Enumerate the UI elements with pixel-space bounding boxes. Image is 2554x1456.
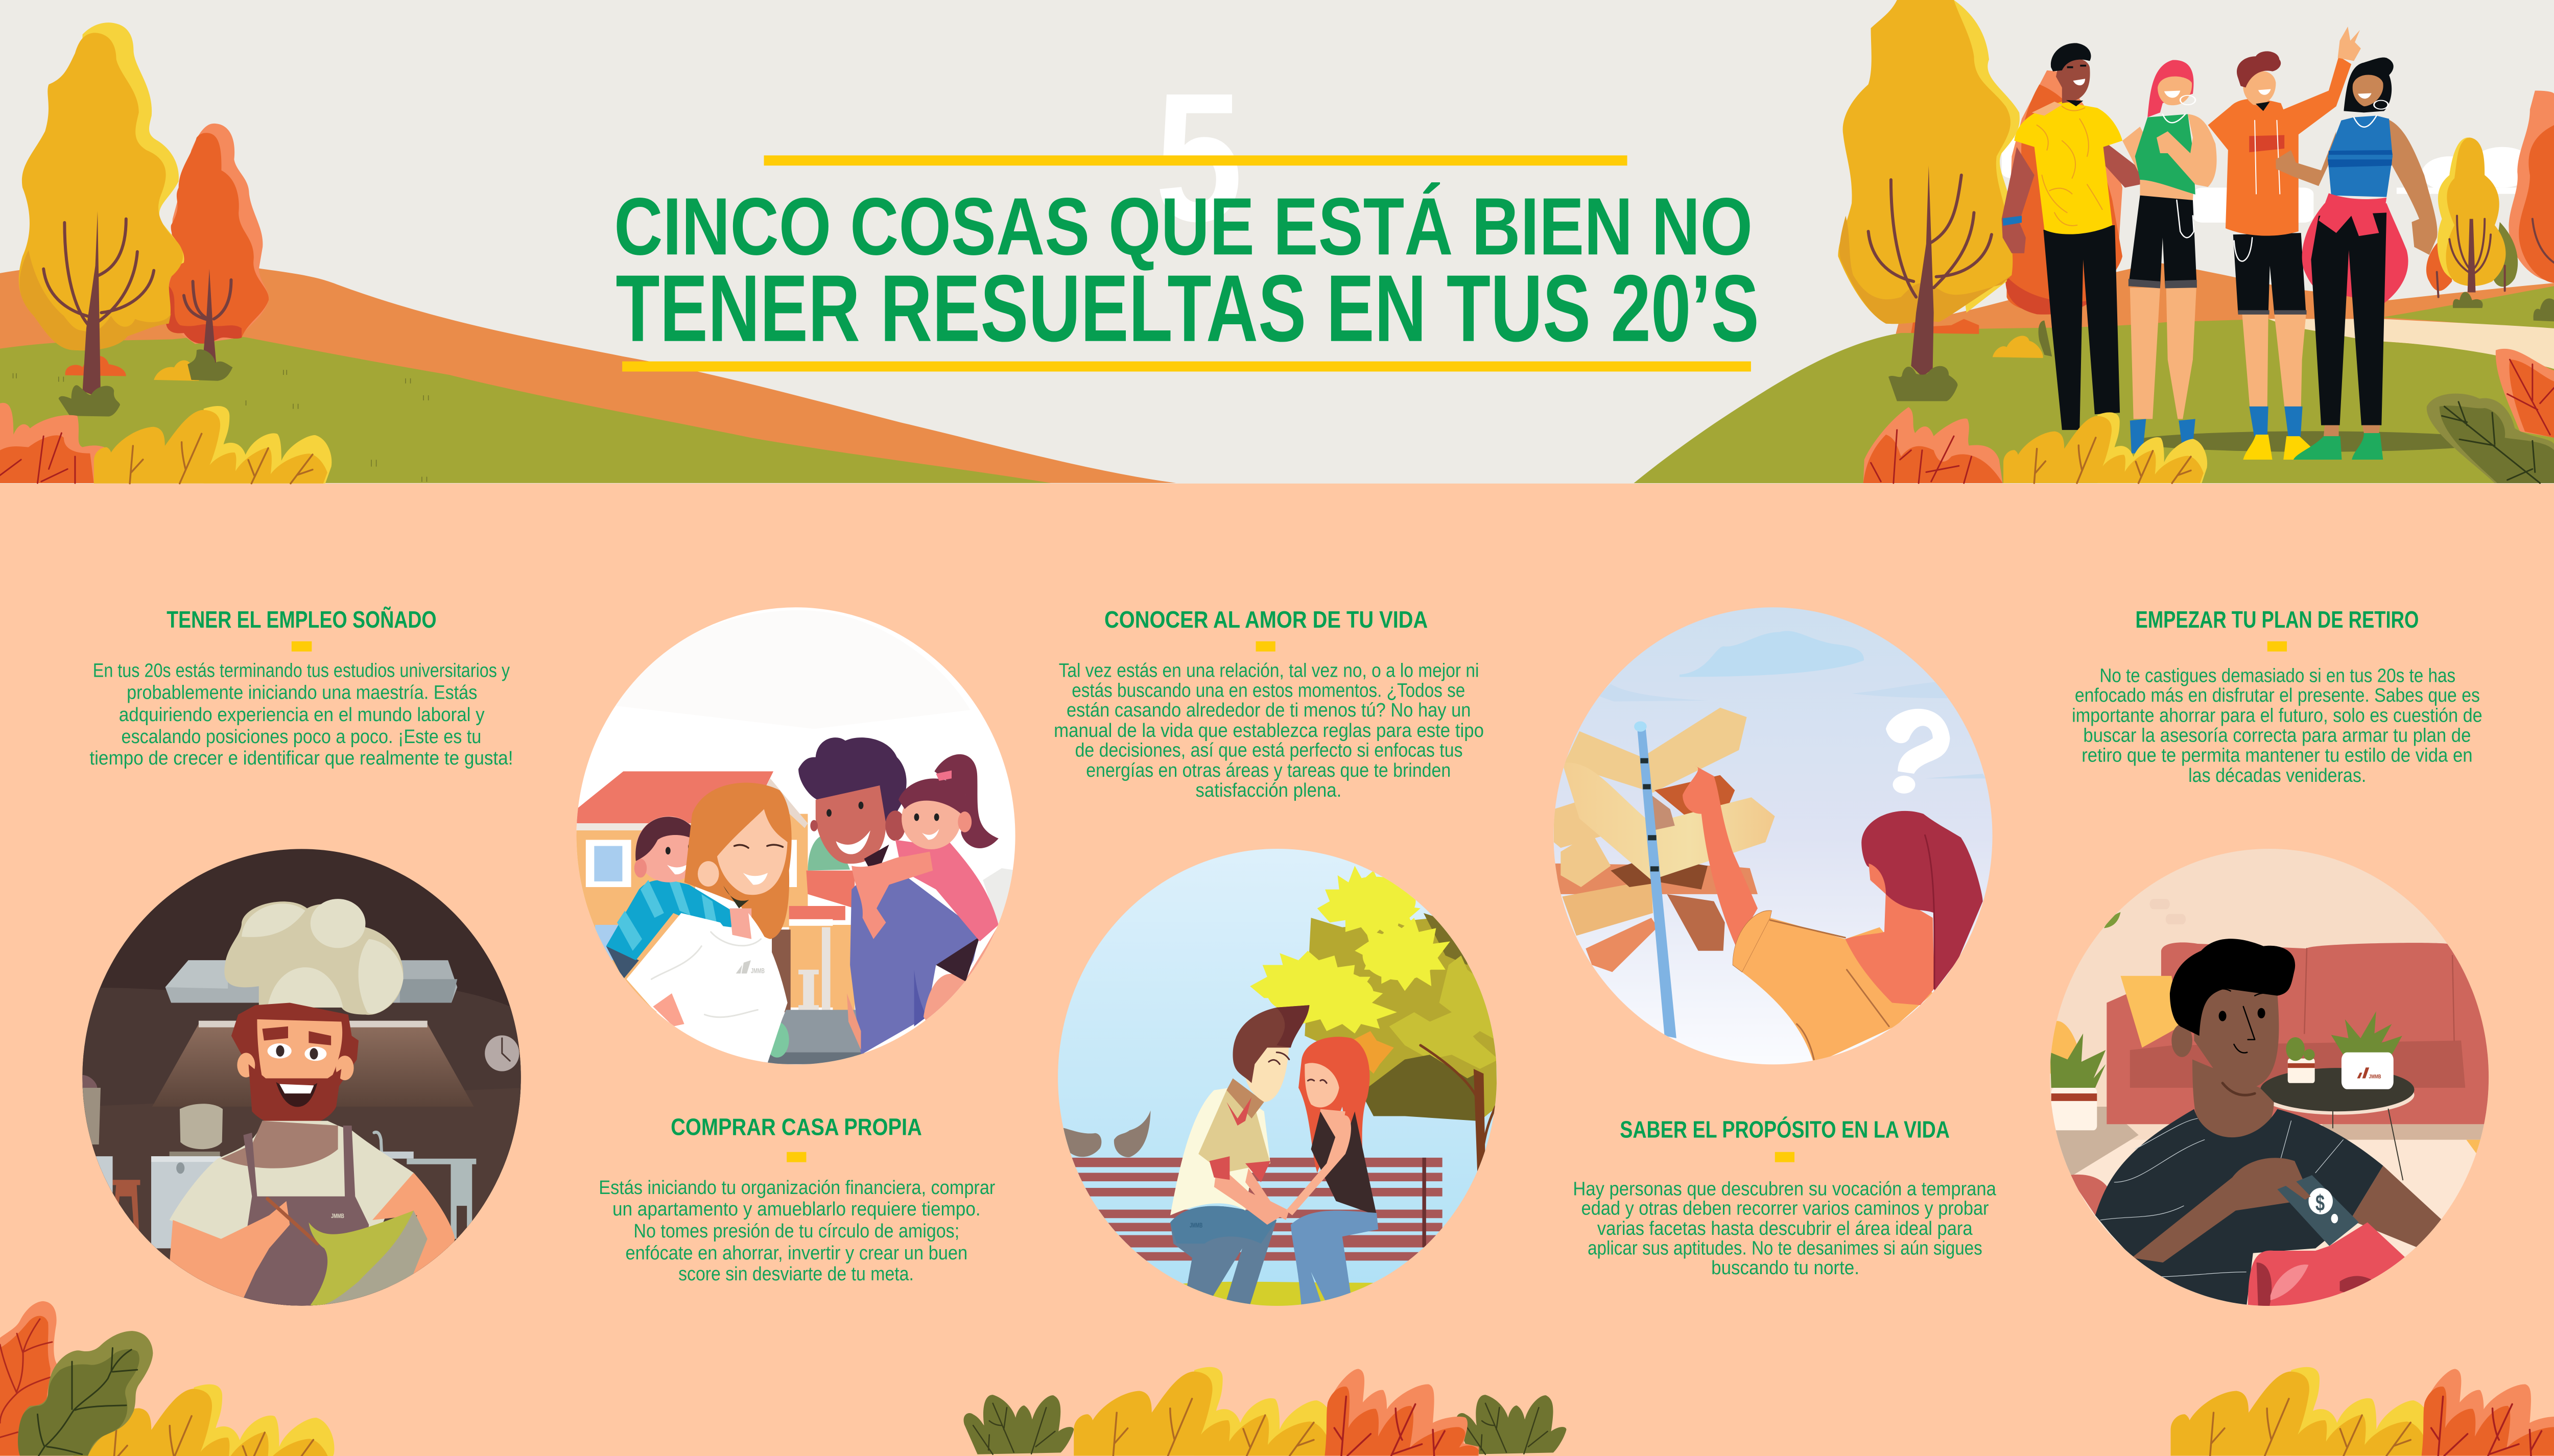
foreground orange shrub xyxy=(0,403,109,483)
panel: empezar tu plan de retiro: buscar la asesoría correcta para armar tu plan de xyxy=(2083,724,2471,746)
panel: comprar casa propia: un apartamento y amueblarlo requiere tiempo. xyxy=(612,1198,981,1220)
person: woman with green top xyxy=(2122,60,2217,453)
foreground leaves right xyxy=(2427,349,2554,483)
title: CINCO COSAS QUE ESTÁ BIEN NO xyxy=(614,181,1753,272)
big yellow tree behind people xyxy=(1838,0,2122,377)
illustration: man saving money: $ xyxy=(2315,1191,2325,1216)
panel: tener el empleo soñado: tiempo de crecer e identificar que realmente te gusta! xyxy=(89,747,513,769)
panel: header landscape xyxy=(0,0,2554,484)
panel: empezar tu plan de retiro: enfocado más en disfrutar el presente. Sabes que es xyxy=(2075,684,2480,706)
green hills and path xyxy=(1634,286,2554,483)
foreground orange shrub right xyxy=(1863,407,2003,483)
person: man in yellow shirt xyxy=(2002,43,2140,430)
orange hill back xyxy=(1896,262,2554,344)
decorative number 5: 5 xyxy=(1155,55,1243,259)
illustration: couple on bench xyxy=(1056,847,1499,1310)
panel: comprar casa propia: COMPRAR CASA PROPIA xyxy=(671,1114,922,1140)
panel: saber el propósito en la vida xyxy=(1573,1116,1996,1278)
panel: comprar casa propia: score sin desviarte de tu meta. xyxy=(678,1262,914,1284)
shrubs: bottom centre xyxy=(964,1367,1567,1455)
illustration: woman at signpost xyxy=(1551,606,1995,1069)
panel: conocer al amor de tu vida: satisfacción plena. xyxy=(1196,779,1341,801)
left trees and shrubs xyxy=(0,22,269,483)
illustration: family and house xyxy=(573,602,1021,1069)
right landscape with trees xyxy=(1634,0,2554,483)
group shadow xyxy=(2133,431,2495,452)
panel: conocer al amor de tu vida: manual de la vida que establezca reglas para este tipo xyxy=(1054,719,1484,741)
panel: saber el propósito en la vida: varias facetas hasta descubrir el área ideal para xyxy=(1597,1217,1973,1239)
title: TENER RESUELTAS EN TUS 20’S xyxy=(616,255,1759,362)
panel: comprar casa propia: enfócate en ahorrar, invertir y crear un buen xyxy=(625,1242,967,1263)
leaves: bottom left xyxy=(0,1301,153,1455)
panel: conocer al amor de tu vida: CONOCER AL AMOR DE TU VIDA xyxy=(1104,606,1428,633)
panel: comprar casa propia: No tomes presión de tu círculo de amigos; xyxy=(633,1220,959,1242)
foreground yellow shrub left xyxy=(94,406,332,484)
shrubs: bottom right xyxy=(2171,1367,2554,1455)
person: woman with blue top xyxy=(2276,57,2438,460)
panel: saber el propósito en la vida: SABER EL PROPÓSITO EN LA VIDA xyxy=(1620,1116,1950,1143)
panel: empezar tu plan de retiro: No te castigues demasiado si en tus 20s te has xyxy=(2099,664,2455,686)
yellow tree xyxy=(19,22,184,395)
panel: conocer al amor de tu vida: de decisiones, así que está perfecto si enfocas tus xyxy=(1075,739,1463,761)
panel: conocer al amor de tu vida: están casando alrededor de ti menos tú? No hay un xyxy=(1067,699,1471,721)
panel: conocer al amor de tu vida: estás buscando una en estos momentos. ¿Todos se xyxy=(1072,679,1465,701)
panel: tener el empleo soñado: probablemente iniciando una maestría. Estás xyxy=(127,681,477,703)
clouds xyxy=(2002,137,2535,223)
illustration: chef in kitchen xyxy=(80,847,524,1310)
illustration: man saving money xyxy=(2048,847,2492,1310)
illustration: family and house: JMMB xyxy=(751,967,765,975)
illustration: chef in kitchen: JMMB xyxy=(331,1213,344,1220)
panel: empezar tu plan de retiro xyxy=(2072,606,2482,786)
foreground yellow shrub right xyxy=(2003,412,2207,483)
left hills xyxy=(0,260,1176,483)
panel: saber el propósito en la vida: buscando tu norte. xyxy=(1711,1256,1859,1278)
panel: tener el empleo soñado xyxy=(89,606,513,769)
panel: tener el empleo soñado: adquiriendo experiencia en el mundo laboral y xyxy=(119,703,485,725)
shrubs: bottom left xyxy=(0,1301,334,1456)
panel: empezar tu plan de retiro: EMPEZAR TU PLAN DE RETIRO xyxy=(2135,606,2419,633)
orange tree xyxy=(166,124,269,363)
panel: conocer al amor de tu vida: Tal vez estás en una relación, tal vez no, o a lo mejor ni xyxy=(1059,659,1479,681)
panel: saber el propósito en la vida: Hay personas que descubren su vocación a temprana xyxy=(1573,1178,1996,1200)
illustration: man saving money: JMMB xyxy=(2369,1073,2381,1080)
small shrubs xyxy=(59,349,232,417)
small trees far right xyxy=(2426,91,2554,321)
panel: saber el propósito en la vida: aplicar sus aptitudes. No te desanimes si aún sigues xyxy=(1588,1237,1982,1259)
title xyxy=(614,155,1759,372)
panel: tener el empleo soñado: En tus 20s estás terminando tus estudios universitarios y xyxy=(93,659,510,681)
panel: conocer al amor de tu vida: energías en otras áreas y tareas que te brinden xyxy=(1086,759,1451,781)
panel: tener el empleo soñado: escalando posiciones poco a poco. ¡Este es tu xyxy=(122,725,481,747)
panel: empezar tu plan de retiro: las décadas venideras. xyxy=(2188,764,2366,786)
panel: comprar casa propia xyxy=(599,1114,995,1284)
panel: tener el empleo soñado: TENER EL EMPLEO SOÑADO xyxy=(167,606,437,633)
panel: empezar tu plan de retiro: importante ahorrar para el futuro, solo es cuestión de xyxy=(2072,704,2482,726)
illustration: couple on bench: JMMB xyxy=(1190,1222,1202,1229)
panel: comprar casa propia: Estás iniciando tu organización financiera, comprar xyxy=(599,1176,995,1198)
grass ticks left xyxy=(13,370,429,482)
panel: saber el propósito en la vida: edad y otras deben recorrer varios caminos y probar xyxy=(1581,1197,1989,1219)
panel: conocer al amor de tu vida xyxy=(1054,606,1484,801)
small shrubs right xyxy=(1888,321,2052,401)
person: man in orange hoodie xyxy=(2208,27,2361,460)
panel: empezar tu plan de retiro: retiro que te permita mantener tu estilo de vida en xyxy=(2082,744,2473,766)
